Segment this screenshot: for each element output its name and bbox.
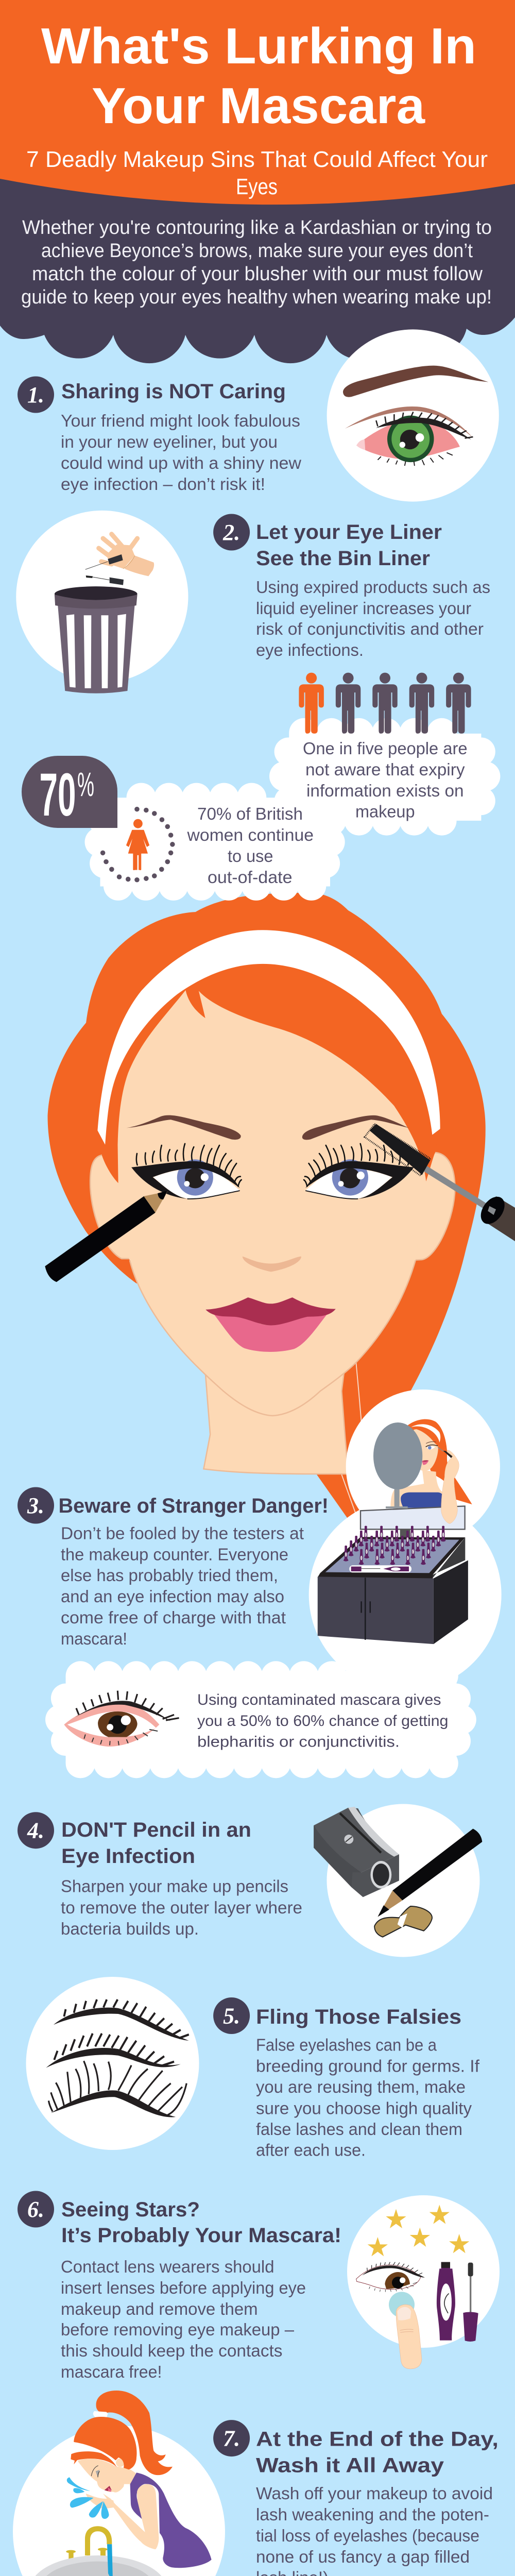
heading: DON'T Pencil in an Eye Infection [61, 1819, 251, 1868]
text: section 5 body: breeding ground for germs. If [256, 2056, 480, 2075]
badge: 3: 3. [27, 1493, 44, 1518]
text: section 2 body: risk of conjunctivitis and other [256, 619, 484, 638]
icon: five people, one orange [299, 673, 471, 734]
text: section 3 body [61, 1524, 304, 1648]
text: section 5 body: after each use. [256, 2141, 366, 2160]
subtitle: 7 Deadly Makeup Sins That Could Affect Your [26, 147, 488, 172]
icon: infected red eye [327, 329, 499, 502]
badge: 6: 6. [27, 2197, 44, 2222]
heading: Beware of Stranger Danger: Beware of Stranger Danger! [59, 1495, 329, 1517]
badge: 2 [213, 514, 250, 550]
subtitle: Eyes [236, 174, 278, 199]
text: section 6 body: makeup and remove them [61, 2299, 258, 2318]
text: section 5 body: sure you choose high quality [256, 2098, 472, 2117]
text: section 6 body: mascara free! [61, 2362, 162, 2381]
text: one in five people: One in five people are [303, 739, 468, 758]
text: section 7 body: lash weakening and the poten- [256, 2505, 489, 2524]
panel: cloud one in five [269, 733, 500, 821]
text: contaminated mascara: Using contaminated mascara gives [197, 1691, 441, 1708]
badge: 7: 7. [223, 2426, 240, 2451]
text: section 4 body: bacteria builds up. [61, 1919, 199, 1938]
text: section 6 body [61, 2257, 306, 2381]
face illustration [45, 893, 515, 1519]
intro text: achieve Beyonce’s brows, make sure your eyes don’t [41, 240, 473, 262]
badge: 6 [18, 2191, 54, 2228]
heading: Seeing Stars?: It’s Probably Your Mascara! [61, 2224, 341, 2247]
title: Your Mascara [92, 77, 426, 134]
text: section 5 body [256, 2036, 480, 2160]
icon: woman washing face at sink [13, 2391, 225, 2576]
text: section 2 body: Using expired products such as [256, 578, 490, 597]
text: one in five people: makeup [355, 802, 415, 821]
text: section 5 body: False eyelashes can be a [256, 2036, 437, 2055]
badge: 70% [22, 756, 117, 829]
icon: makeup counter [318, 1526, 468, 1644]
icon: woman at mirror [360, 1419, 472, 1538]
badge: 1: 1. [27, 382, 44, 408]
intro text: Whether you're contouring like a Kardashian or trying to [22, 217, 492, 239]
panel: orange header [0, 0, 515, 205]
icon: infected brown eye [64, 1691, 179, 1747]
intro text: guide to keep your eyes healthy when wearing make up! [21, 286, 492, 308]
badge: 4 [18, 1812, 54, 1849]
panel: cloud contaminated mascara [45, 1676, 476, 1764]
text: contaminated mascara: blepharitis or conjunctivitis. [197, 1734, 400, 1751]
text: section 2 body: eye infections. [256, 640, 364, 659]
text: section 1 body: eye infection – don’t risk it! [61, 474, 265, 494]
heading: Seeing Stars?: Seeing Stars? [61, 2198, 200, 2221]
text: section 3 body: and an eye infection may also [61, 1587, 284, 1606]
text: section 3 body: else has probably tried them, [61, 1566, 278, 1585]
heading: Let your Eye Liner See the Bin Liner [256, 521, 442, 570]
text: section 3 body: come free of charge with that [61, 1608, 286, 1627]
icon: woman in dotted ring [100, 807, 175, 883]
badge: 7 [213, 2420, 250, 2456]
heading: DON'T Pencil in an Eye Infection: Eye Infection [61, 1845, 195, 1868]
text: one in five people: information exists on [306, 781, 464, 800]
text: section 1 body [61, 411, 301, 494]
text: section 7 body: none of us fancy a gap filled [256, 2547, 470, 2566]
text: section 3 body: the makeup counter. Everyone [61, 1545, 288, 1564]
heading: At the End of the Day: At the End of the Day, [256, 2428, 499, 2451]
panel: white circles behind mirror and counter [309, 1389, 502, 1691]
text: section 2 body [256, 578, 490, 659]
badge: 5 [213, 1997, 250, 2034]
text: section 1 body: could wind up with a shiny new [61, 453, 301, 472]
text: section 4 body: to remove the outer layer where [61, 1898, 302, 1917]
heading: Let your Eye Liner See the Bin Liner: Let your Eye Liner [256, 521, 442, 544]
text: contaminated mascara [197, 1691, 448, 1751]
text: contaminated mascara: you a 50% to 60% chance of getting [197, 1713, 448, 1730]
panel: cloud 70 percent [85, 798, 345, 886]
text: section 7 body [256, 2484, 493, 2576]
badge: 70%: 70 [39, 761, 76, 829]
subtitle [26, 147, 488, 199]
heading: Fling Those Falsies: Fling Those Falsies [256, 2006, 461, 2028]
text: section 1 body: Your friend might look fabulous [61, 411, 300, 430]
text: section 3 body: mascara! [61, 1629, 127, 1648]
badge: 3 [18, 1487, 54, 1524]
text: 70 percent of British women: women continue [186, 825, 314, 844]
text: section 4 body: Sharpen your make up pencils [61, 1877, 288, 1896]
icon: hand dropping eyeliner [85, 534, 154, 585]
title [41, 18, 476, 134]
text: section 7 body: Wash off your makeup to avoid [256, 2484, 493, 2503]
heading: Let your Eye Liner See the Bin Liner: See the Bin Liner [256, 547, 430, 570]
text: 70 percent of British women: out-of-date [208, 868, 293, 887]
badge: 1 [18, 376, 54, 413]
text: 70 percent of British women: to use [228, 846, 273, 866]
text: section 6 body: this should keep the contacts [61, 2341, 282, 2360]
icon: false lashes [26, 1977, 199, 2150]
badge: 70%: % [77, 765, 94, 803]
text: section 6 body: Contact lens wearers should [61, 2257, 274, 2276]
badge: 2: 2. [222, 520, 240, 545]
text: section 2 body: liquid eyeliner increases your [256, 599, 471, 618]
text: section 4 body [61, 1877, 302, 1938]
intro text: match the colour of your blusher with our must follow [32, 263, 483, 285]
text: 70 percent of British women: 70% of British [197, 804, 303, 823]
icon: sharpener and pencil [314, 1804, 482, 1957]
heading: Seeing Stars? [61, 2198, 341, 2247]
text: section 5 body: false lashes and clean them [256, 2120, 462, 2139]
heading: Sharing is NOT Caring: Sharing is NOT Caring [61, 380, 286, 403]
text: section 5 body: you are reusing them, make [256, 2077, 466, 2096]
icon: rubbish bin [16, 511, 188, 693]
intro text [21, 217, 492, 308]
icon: stars, eye, contact lens, mascara [347, 2195, 500, 2369]
badge: 5: 5. [223, 2003, 240, 2029]
heading: DON'T Pencil in an Eye Infection: DON'T Pencil in an [61, 1819, 251, 1841]
badge: 4: 4. [27, 1818, 44, 1843]
text: one in five people: not aware that expiry [305, 760, 465, 779]
title: What's Lurking In [41, 18, 476, 74]
text: section 6 body: before removing eye makeup – [61, 2320, 295, 2339]
text: section 1 body: in your new eyeliner, but you [61, 432, 278, 451]
text: one in five people [303, 739, 468, 821]
text: 70 percent of British women [186, 804, 314, 887]
heading: At the End of the Day: Wash it All Away [256, 2454, 444, 2477]
text: section 6 body: insert lenses before applying eye [61, 2278, 306, 2297]
heading: At the End of the Day [256, 2428, 499, 2477]
text: section 7 body: tial loss of eyelashes (because [256, 2526, 479, 2545]
panel: intro band [0, 155, 515, 363]
text: section 3 body: Don’t be fooled by the testers at [61, 1524, 304, 1543]
